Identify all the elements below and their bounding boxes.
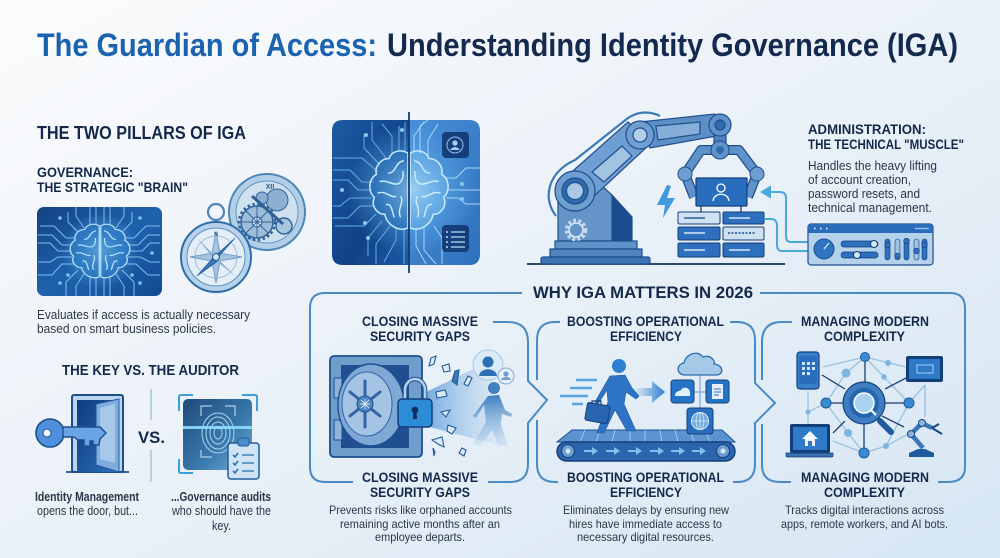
top heading: CLOSING MASSIVE	[362, 313, 478, 329]
icon: cloud and resources	[671, 353, 729, 434]
governance heading	[37, 164, 188, 195]
icon: compass	[181, 204, 251, 292]
text: administration: Handles the heavy lifting	[808, 159, 937, 173]
description: apps, remote workers, and AI bots.	[781, 517, 948, 531]
panel: the key vs. the auditor	[35, 362, 271, 533]
text: administration: ADMINISTRATION:	[808, 121, 926, 137]
divider and VS label: VS.	[138, 428, 165, 447]
heading: why IGA matters in 2026: WHY IGA MATTERS IN 2026	[533, 283, 753, 302]
caption: identity management	[35, 490, 140, 518]
text: administration: THE TECHNICAL "MUSCLE"	[808, 136, 964, 152]
icon: data shards and wind	[420, 356, 502, 456]
bottom heading	[362, 469, 478, 500]
arrows from control panel	[762, 187, 808, 251]
top heading	[801, 313, 929, 344]
top heading	[362, 313, 478, 344]
panel: managing modern complexity	[781, 313, 948, 531]
icon: circuit brain	[37, 207, 162, 296]
icon: compass: N	[214, 232, 218, 238]
governance description: Evaluates if access is actually necessary	[37, 308, 251, 322]
icon: tablet	[906, 356, 943, 382]
title: Understanding Identity Governance (IGA)	[387, 27, 958, 63]
panel: boosting operational efficiency	[557, 313, 735, 544]
bottom heading	[567, 469, 724, 500]
caption: governance audits: ...Governance audits	[171, 490, 271, 504]
title	[37, 27, 958, 63]
bottom heading: COMPLEXITY	[824, 484, 906, 500]
server racks	[678, 212, 764, 257]
panel: closing massive security gaps	[329, 313, 514, 544]
caption: governance audits	[171, 490, 271, 533]
top heading: MANAGING MODERN	[801, 313, 929, 329]
icon: split brain	[332, 112, 480, 273]
icon: pocket watch	[229, 174, 305, 250]
icon: laptop	[786, 424, 833, 457]
robot base and arm	[527, 112, 785, 264]
governance heading: THE STRATEGIC "BRAIN"	[37, 179, 188, 195]
caption: governance audits: who should have the	[171, 504, 271, 518]
icon: padlock	[398, 379, 432, 427]
governance description: based on smart business policies.	[37, 322, 216, 336]
top heading	[567, 313, 724, 344]
caption: identity management: Identity Management	[35, 490, 140, 504]
title: The Guardian of Access:	[37, 27, 377, 63]
description: employee departs.	[375, 530, 465, 544]
bottom heading	[801, 469, 929, 500]
network lines	[808, 357, 925, 453]
top heading: COMPLEXITY	[824, 328, 906, 344]
description: Eliminates delays by ensuring new	[563, 503, 729, 517]
user screen	[696, 178, 747, 212]
text: administration: password resets, and	[808, 187, 920, 201]
icon: conveyor belt	[557, 430, 735, 461]
heading: key vs auditor: THE KEY VS. THE AUDITOR	[62, 362, 239, 379]
bottom heading: BOOSTING OPERATIONAL	[567, 469, 724, 485]
panel: governance	[37, 164, 305, 336]
text: administration	[808, 121, 964, 215]
icon: open door	[66, 395, 129, 472]
icon: key	[36, 419, 106, 447]
bottom heading: SECURITY GAPS	[370, 484, 470, 500]
icon: vault	[330, 356, 422, 457]
top heading: BOOSTING OPERATIONAL	[567, 313, 724, 329]
bottom heading: MANAGING MODERN	[801, 469, 929, 485]
icon: fingerprint scan with clipboard	[179, 395, 259, 479]
heading: the two pillars of IGA: THE TWO PILLARS OF IGA	[37, 123, 246, 143]
bottom heading: CLOSING MASSIVE	[362, 469, 478, 485]
description: necessary digital resources.	[577, 530, 714, 544]
description	[563, 503, 729, 544]
text: administration: of account creation,	[808, 173, 911, 187]
description: remaining active months after an	[340, 517, 500, 531]
divider and VS label	[138, 389, 165, 482]
description	[781, 503, 948, 531]
governance heading: GOVERNANCE:	[37, 164, 133, 180]
top heading: EFFICIENCY	[610, 328, 683, 344]
icon: pocket watch: XII	[266, 184, 274, 191]
icon: mini robot arm	[908, 420, 942, 457]
icon: phone	[797, 352, 819, 389]
description: Prevents risks like orphaned accounts	[329, 503, 512, 517]
network nodes	[806, 352, 914, 458]
caption: identity management: opens the door, but...	[37, 504, 138, 518]
gear on base	[566, 220, 586, 240]
icon: walking employee	[560, 359, 639, 433]
icon: robotic arm with servers	[527, 112, 933, 265]
top heading: SECURITY GAPS	[370, 328, 470, 344]
frame brackets and chevrons	[310, 293, 965, 482]
control panel	[808, 224, 933, 265]
icon: departing employee	[473, 350, 514, 447]
description	[329, 503, 512, 544]
icon: magnifier	[843, 382, 891, 432]
bottom heading: EFFICIENCY	[610, 484, 683, 500]
gripper claw	[678, 141, 764, 197]
caption: governance audits: key.	[212, 519, 231, 533]
description: Tracks digital interactions across	[785, 503, 944, 517]
governance description	[37, 308, 251, 336]
description: hires have immediate access to	[569, 517, 722, 531]
text: administration: technical management.	[808, 201, 932, 215]
lightning bolt	[657, 185, 675, 218]
arrow to resources	[633, 381, 665, 403]
